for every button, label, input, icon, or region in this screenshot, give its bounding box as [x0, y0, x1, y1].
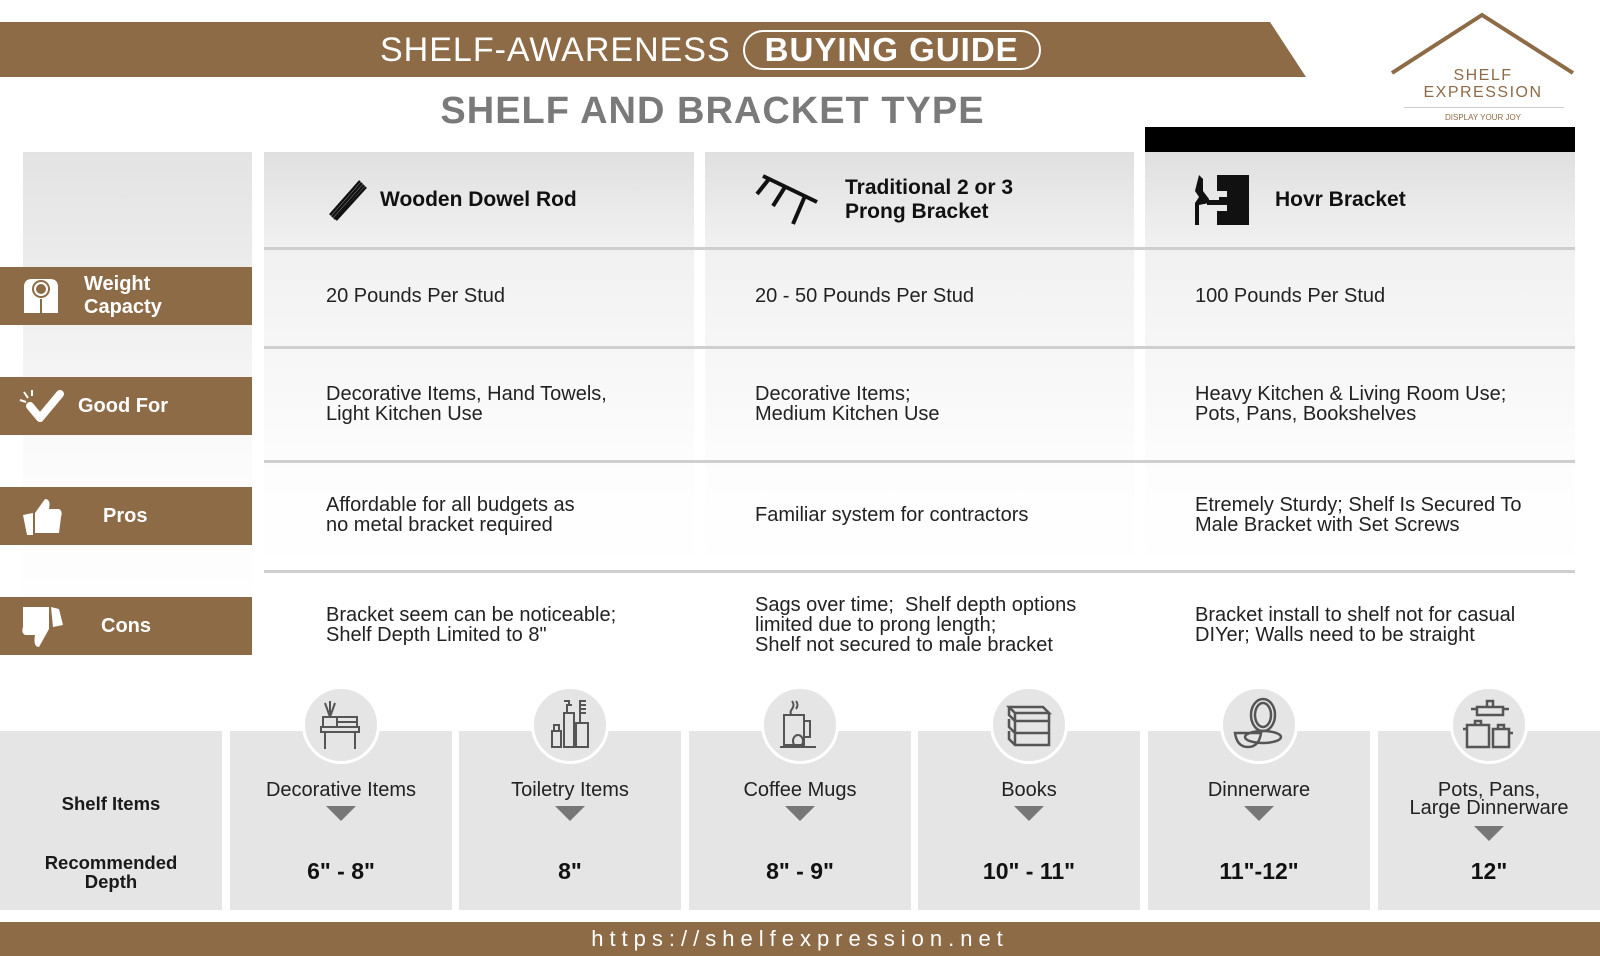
footer: https://shelfexpression.net	[591, 926, 1009, 951]
icon: toiletry	[531, 686, 609, 764]
item: books: Books	[1001, 779, 1057, 801]
title	[380, 30, 1041, 70]
icon: check	[20, 390, 64, 422]
text: 8"	[558, 858, 582, 884]
logo	[1391, 12, 1574, 122]
text: DIYer; Walls need to be straight	[1195, 624, 1475, 646]
icon: prong bracket	[756, 174, 818, 225]
item: decorative: Decorative Items	[266, 779, 416, 801]
logo: EXPRESSION	[1423, 84, 1543, 101]
item: dinnerware: Dinnerware	[1208, 779, 1310, 801]
item boxes	[230, 731, 1600, 910]
item: pots	[1410, 779, 1568, 819]
column header: prong bracket	[705, 152, 1134, 248]
column header: prong bracket: Traditional 2 or 3	[845, 176, 1013, 199]
column header: hovr bracket: Hovr Bracket	[1275, 188, 1406, 211]
body row backgrounds	[264, 249, 1575, 571]
icon: thumbs down	[22, 607, 63, 647]
row: pros: no metal bracket required	[326, 514, 553, 536]
text: Familiar system for contractors	[755, 504, 1028, 526]
text: Sags over time; Shelf depth options	[755, 594, 1076, 616]
column header: prong bracket: Prong Bracket	[845, 200, 989, 223]
row: weight capacity: 20 Pounds Per Stud	[326, 285, 505, 307]
label: weight capacity: Capacty	[84, 296, 162, 318]
item: pots: Large Dinnerware	[1410, 797, 1568, 819]
label: pros: Pros	[103, 504, 147, 526]
icon: pots	[1450, 686, 1528, 764]
text: Decorative Items;	[755, 383, 911, 405]
text: Etremely Sturdy; Shelf Is Secured To	[1195, 494, 1521, 516]
left column panel	[23, 152, 252, 662]
row: cons: Shelf Depth Limited to 8"	[326, 624, 547, 646]
text: Heavy Kitchen & Living Room Use;	[1195, 383, 1506, 405]
row: cons	[326, 604, 616, 646]
icon: books	[990, 686, 1068, 764]
label: pros	[0, 487, 252, 545]
column header: hovr bracket	[1145, 152, 1575, 248]
row: cons: Bracket seem can be noticeable;	[326, 604, 616, 626]
bottom row labels box: Recommended	[45, 852, 177, 873]
row: pros: Affordable for all budgets as	[326, 494, 575, 516]
row: pros	[326, 494, 575, 536]
label: weight capacity	[0, 267, 252, 325]
title: SHELF-AWARENESS	[380, 30, 731, 68]
title: BUYING GUIDE	[765, 31, 1019, 68]
column header: wooden dowel rod	[264, 152, 694, 248]
logo: DISPLAY YOUR JOY	[1445, 113, 1521, 122]
column header: wooden dowel rod: Wooden Dowel Rod	[380, 188, 577, 211]
item: coffee mugs: Coffee Mugs	[743, 779, 857, 801]
text: 8" - 9"	[766, 858, 834, 884]
text: 100 Pounds Per Stud	[1195, 285, 1385, 307]
item: toiletry: Toiletry Items	[511, 779, 629, 801]
text: Male Bracket with Set Screws	[1195, 514, 1460, 536]
label: good for: Good For	[78, 394, 168, 416]
item: pots: Pots, Pans,	[1438, 779, 1540, 801]
icon: decorative items	[302, 686, 380, 764]
text: 6" - 8"	[307, 858, 375, 884]
label: good for	[0, 377, 252, 435]
row: good for	[326, 383, 607, 425]
logo: SHELF	[1453, 67, 1513, 84]
row: good for: Light Kitchen Use	[326, 403, 483, 425]
bottom row labels box	[0, 731, 222, 910]
label: cons: Cons	[101, 614, 151, 636]
label: weight capacity: Weight	[84, 273, 150, 295]
footer	[0, 922, 1600, 956]
text: Bracket install to shelf not for casual	[1195, 604, 1515, 626]
text: Pots, Pans, Bookshelves	[1195, 403, 1416, 425]
bottom row labels box: Shelf Items	[62, 793, 160, 814]
header bar	[0, 22, 1306, 77]
text: 20 - 50 Pounds Per Stud	[755, 285, 974, 307]
text: limited due to prong length;	[755, 614, 996, 636]
icon: hovr bracket	[1195, 175, 1249, 225]
subtitle: SHELF AND BRACKET TYPE	[440, 90, 985, 132]
icon: scale	[24, 279, 58, 313]
row: good for: Decorative Items, Hand Towels,	[326, 383, 607, 405]
text: Shelf not secured to male bracket	[755, 634, 1053, 656]
icon: dinnerware	[1220, 686, 1298, 764]
text: 11"-12"	[1219, 858, 1299, 884]
text: 12"	[1471, 858, 1507, 884]
icon: thumbs up	[23, 499, 62, 535]
icon: coffee mug	[761, 686, 839, 764]
text: 10" - 11"	[983, 858, 1075, 884]
bottom row labels box: Depth	[85, 871, 137, 892]
label: cons	[0, 597, 252, 655]
black bar	[1145, 127, 1575, 152]
icon: dowel rod	[329, 180, 367, 221]
text: Medium Kitchen Use	[755, 403, 940, 425]
